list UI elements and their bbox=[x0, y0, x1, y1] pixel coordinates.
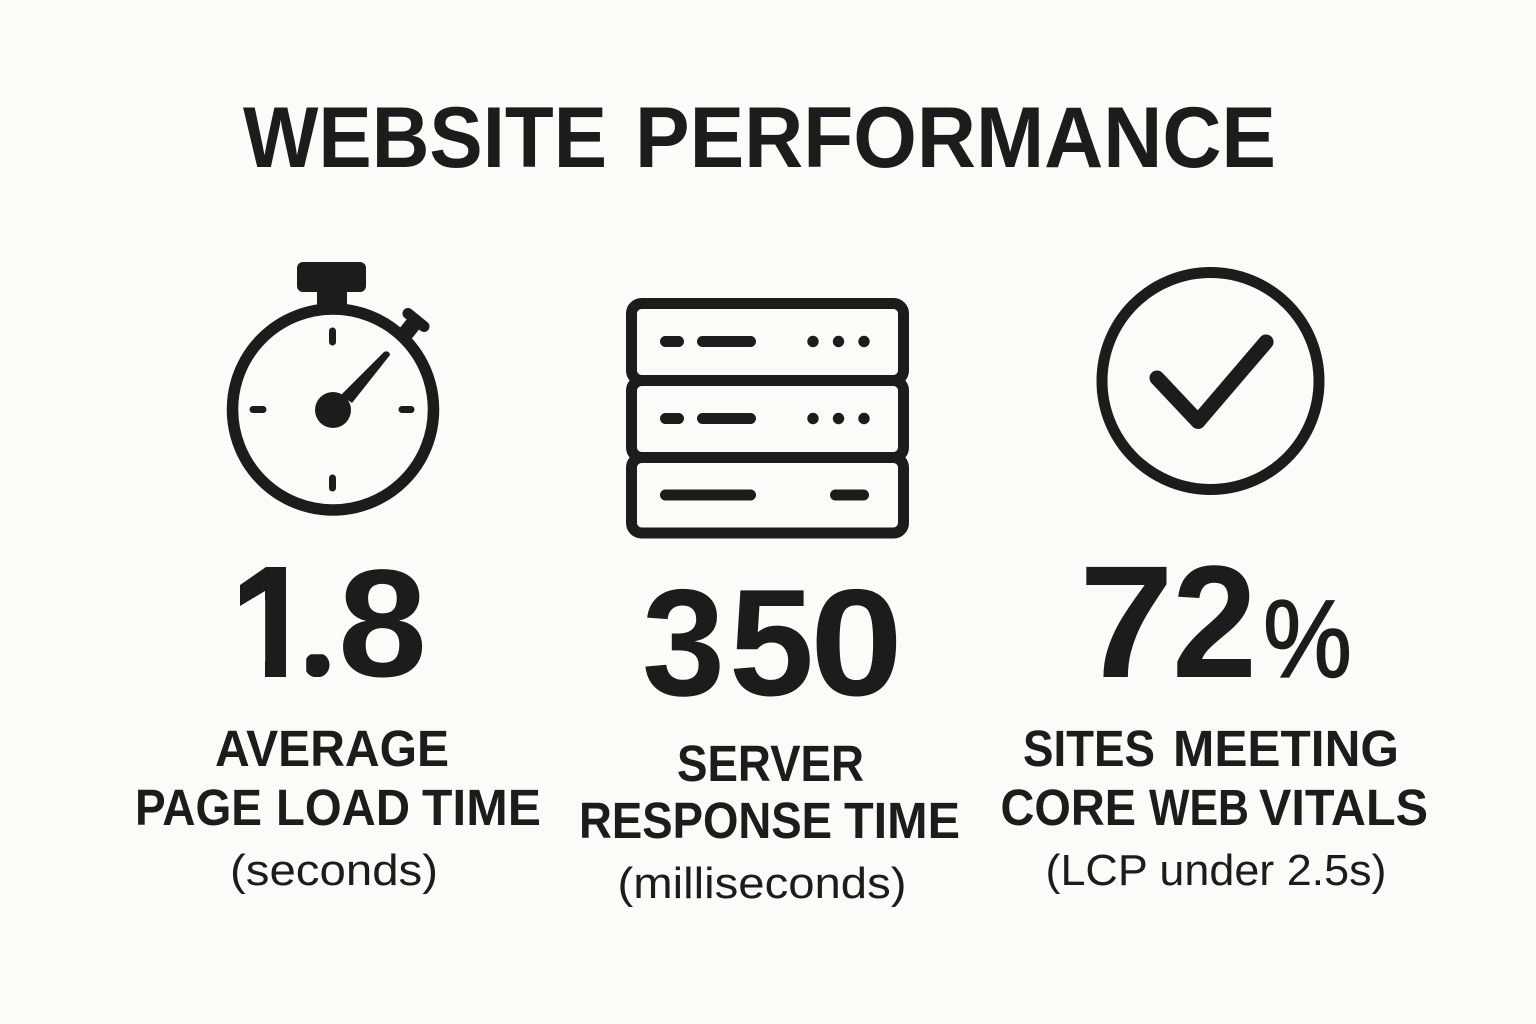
icon: server stack bbox=[632, 304, 904, 533]
metric: page load value: 1 bbox=[230, 539, 315, 710]
metric: page load value: . bbox=[295, 539, 341, 710]
metric: server response label: SERVER bbox=[677, 735, 864, 792]
metric: server response value: 0 bbox=[810, 558, 903, 728]
metric: page load value: 8 bbox=[338, 538, 427, 709]
metric: core web vitals value: 2 bbox=[1172, 532, 1257, 711]
icon: stopwatch bbox=[232, 262, 434, 510]
metric: server response value: 5 bbox=[729, 558, 814, 728]
title bbox=[243, 90, 1276, 186]
metric: core web vitals value bbox=[1079, 532, 1352, 711]
metric: core web vitals label: SITES bbox=[1023, 720, 1155, 777]
metric: server response label bbox=[579, 735, 960, 908]
metric: page load value bbox=[240, 567, 422, 678]
icon: check circle bbox=[1102, 272, 1319, 490]
metric: core web vitals label: CORE bbox=[1000, 779, 1136, 836]
metric: server response label: RESPONSE bbox=[579, 792, 832, 849]
title: WEBSITE bbox=[243, 90, 607, 186]
metric: core web vitals value: % bbox=[1263, 578, 1352, 701]
metric: core web vitals value: 7 bbox=[1079, 532, 1174, 711]
metric: server response label: TIME bbox=[844, 792, 960, 849]
metric: core web vitals label bbox=[1000, 720, 1428, 895]
metric: page load label: LOAD bbox=[276, 779, 410, 836]
metric: page load label: (seconds) bbox=[230, 846, 438, 895]
metric: core web vitals label: VITALS bbox=[1259, 779, 1428, 836]
metric: page load label bbox=[135, 720, 541, 895]
metric: server response label: (milliseconds) bbox=[618, 859, 906, 908]
metric: server response value: 3 bbox=[642, 558, 725, 728]
metric: core web vitals label: MEETING bbox=[1173, 720, 1399, 777]
title: PERFORMANCE bbox=[635, 90, 1276, 186]
metric: core web vitals label: WEB bbox=[1149, 779, 1249, 836]
metric: core web vitals label: (LCP under 2.5s) bbox=[1046, 846, 1386, 895]
metric: page load label: AVERAGE bbox=[215, 720, 449, 777]
metric: page load label: TIME bbox=[422, 779, 541, 836]
metric: page load label: PAGE bbox=[135, 779, 262, 836]
metric: server response value bbox=[642, 558, 903, 728]
